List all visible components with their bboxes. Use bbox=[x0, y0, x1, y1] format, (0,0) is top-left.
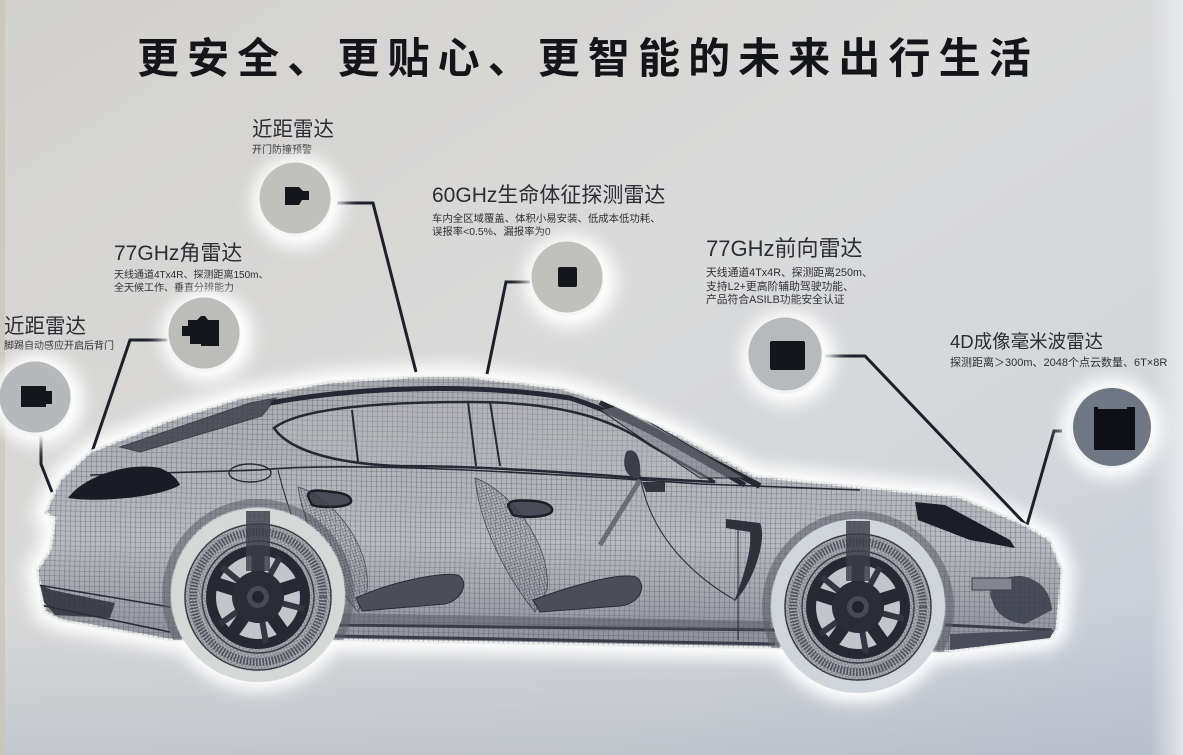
tail light bbox=[68, 467, 180, 500]
label: tailgate short-range radar bbox=[4, 315, 114, 352]
label: 77GHz corner radar: 天线通道4Tx4R、探测距离150m、 bbox=[114, 268, 268, 281]
label: door short-range radar: 开门防撞预警 bbox=[252, 143, 312, 156]
leader line: kick sensor radar bbox=[41, 436, 52, 492]
label: 77GHz corner radar: 全天候工作、垂直分辨能力 bbox=[114, 281, 234, 294]
front seat bbox=[475, 478, 642, 612]
label: 77GHz front radar: 支持L2+更高阶辅助驾驶功能、 bbox=[706, 279, 854, 293]
wing mirror and steering column bbox=[600, 450, 665, 545]
label: 77GHz front radar: 产品符合ASILB功能安全认证 bbox=[706, 292, 845, 306]
door shut lines bbox=[278, 470, 738, 640]
front air intake bbox=[972, 576, 1052, 624]
label: 60GHz vital signs radar bbox=[432, 184, 665, 238]
front lip bbox=[950, 630, 1054, 650]
leader line: corner radar bbox=[92, 340, 168, 452]
leader line: front radar bbox=[825, 356, 1028, 527]
label: 77GHz corner radar bbox=[114, 242, 268, 294]
label: 4D imaging radar: 4D成像毫米波雷达 bbox=[950, 331, 1103, 352]
radar disc: door short-range radar bbox=[252, 156, 344, 248]
leader line: 60GHz radar bbox=[487, 282, 530, 374]
label: 77GHz front radar: 天线通道4Tx4R、探测距离250m、 bbox=[706, 265, 873, 279]
side windows bbox=[274, 402, 715, 482]
label: tailgate short-range radar: 脚踢自动感应开启后背门 bbox=[4, 339, 114, 352]
label: 4D imaging radar: 探测距离＞300m、2048个点云数量、6T×8R bbox=[950, 355, 1167, 369]
radar disc: 77GHz corner radar bbox=[161, 290, 253, 382]
title: 更安全、更贴心、更智能的未来出行生活 bbox=[137, 35, 1039, 82]
label: tailgate short-range radar: 近距雷达 bbox=[4, 315, 86, 338]
label: door short-range radar: 近距雷达 bbox=[252, 118, 334, 141]
label: 60GHz vital signs radar: 误报率<0.5%、漏报率为0 bbox=[432, 225, 551, 238]
front door handle bbox=[508, 501, 552, 517]
car body silhouette bbox=[37, 377, 1062, 652]
fuel flap bbox=[229, 464, 271, 482]
label: 60GHz vital signs radar: 60GHz生命体征探测雷达 bbox=[432, 184, 665, 207]
leader line: door radar bbox=[337, 203, 416, 372]
rear seat bbox=[298, 487, 464, 612]
label: 77GHz front radar bbox=[706, 236, 873, 306]
front wheel bbox=[771, 519, 945, 693]
rear bumper lines bbox=[38, 585, 170, 632]
label: 4D imaging radar bbox=[950, 331, 1167, 369]
label: 60GHz vital signs radar: 车内全区域覆盖、体积小易安装、低成本低功耗、 bbox=[432, 212, 661, 225]
sill lines bbox=[335, 625, 1052, 644]
car wireframe bbox=[37, 377, 1062, 699]
rear wheel bbox=[171, 508, 345, 682]
car backlight glow bbox=[37, 377, 1062, 703]
roof rail bbox=[270, 389, 745, 485]
radar disc: tailgate short-range radar bbox=[0, 354, 84, 446]
wheel arches bbox=[162, 499, 354, 640]
radar disc: 4D imaging radar bbox=[1062, 378, 1162, 478]
leader line: 4D radar bbox=[1027, 431, 1062, 525]
front fender vent bbox=[726, 519, 762, 602]
belt line bbox=[90, 467, 860, 490]
rear door handle bbox=[308, 491, 351, 507]
label: 77GHz front radar: 77GHz前向雷达 bbox=[706, 236, 862, 261]
rear diffuser bbox=[40, 585, 115, 618]
windshield strip bbox=[600, 402, 760, 486]
headlight bbox=[915, 502, 1015, 548]
label: 77GHz corner radar: 77GHz角雷达 bbox=[114, 242, 242, 265]
body details bbox=[40, 386, 1052, 652]
radar disc: 77GHz front radar bbox=[741, 311, 835, 405]
label: door short-range radar bbox=[252, 118, 334, 156]
rear glass bbox=[120, 398, 276, 452]
radar disc: 60GHz vital signs radar bbox=[524, 235, 616, 327]
